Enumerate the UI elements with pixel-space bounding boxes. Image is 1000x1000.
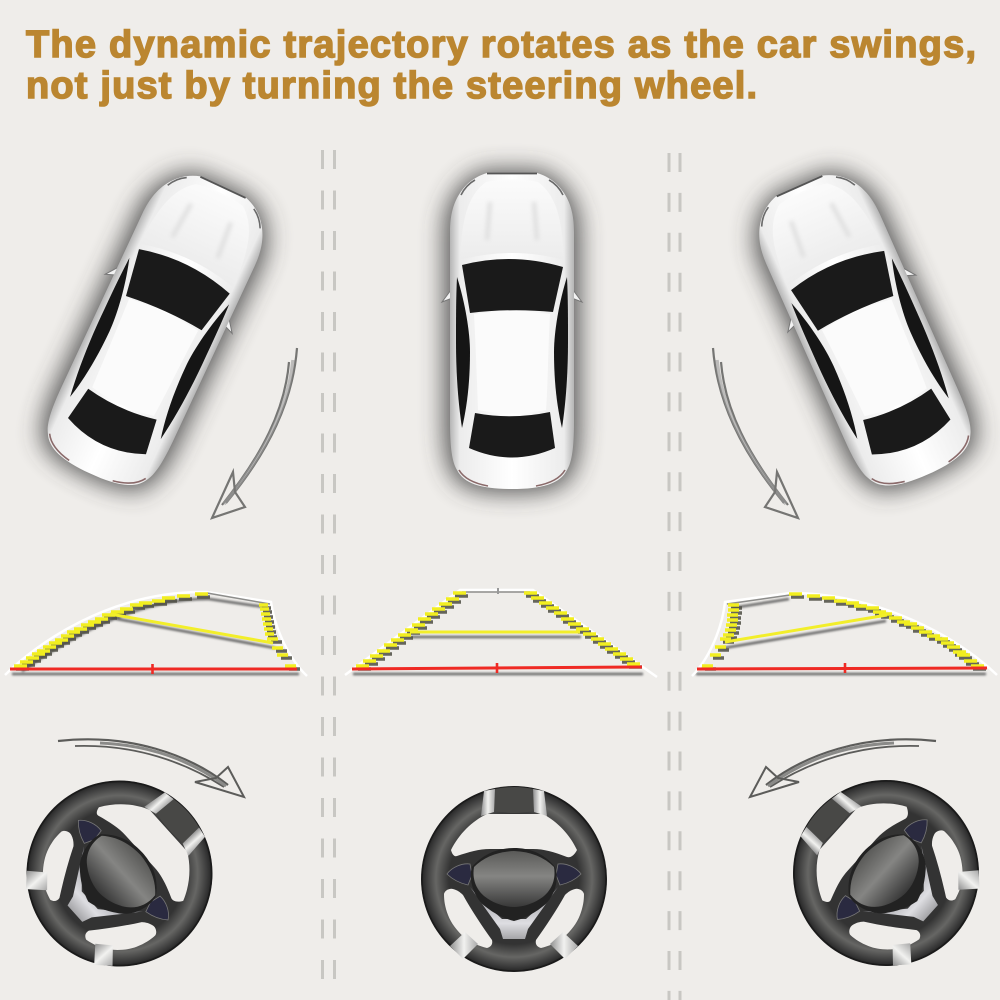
steering wheel: centre <box>421 786 607 972</box>
arrow: left car swing <box>212 348 297 518</box>
hatch <box>14 594 296 666</box>
hatch <box>702 594 984 666</box>
hatch shadow <box>705 597 986 669</box>
car: swung right <box>734 155 993 507</box>
arrow: left steering <box>58 739 244 797</box>
steering wheel: left <box>0 742 251 1000</box>
title <box>26 24 976 107</box>
hatch shadow <box>16 597 300 669</box>
trajectory: right <box>692 593 997 676</box>
lane divider right <box>669 153 680 1000</box>
hatch <box>356 593 640 666</box>
lane divider left <box>322 150 334 1000</box>
steering wheel: right <box>755 742 1000 1000</box>
car: swung left <box>25 155 288 506</box>
title: not just by turning the steering wheel. <box>26 65 757 107</box>
car: straight <box>442 170 582 493</box>
arrow: right car swing <box>713 348 798 518</box>
trajectory: centre <box>345 588 657 677</box>
title: The dynamic trajectory rotates as the car swings, <box>26 24 976 66</box>
arrow: right steering <box>750 739 936 797</box>
trajectory: left <box>5 592 307 676</box>
hatch shadow <box>358 596 642 669</box>
